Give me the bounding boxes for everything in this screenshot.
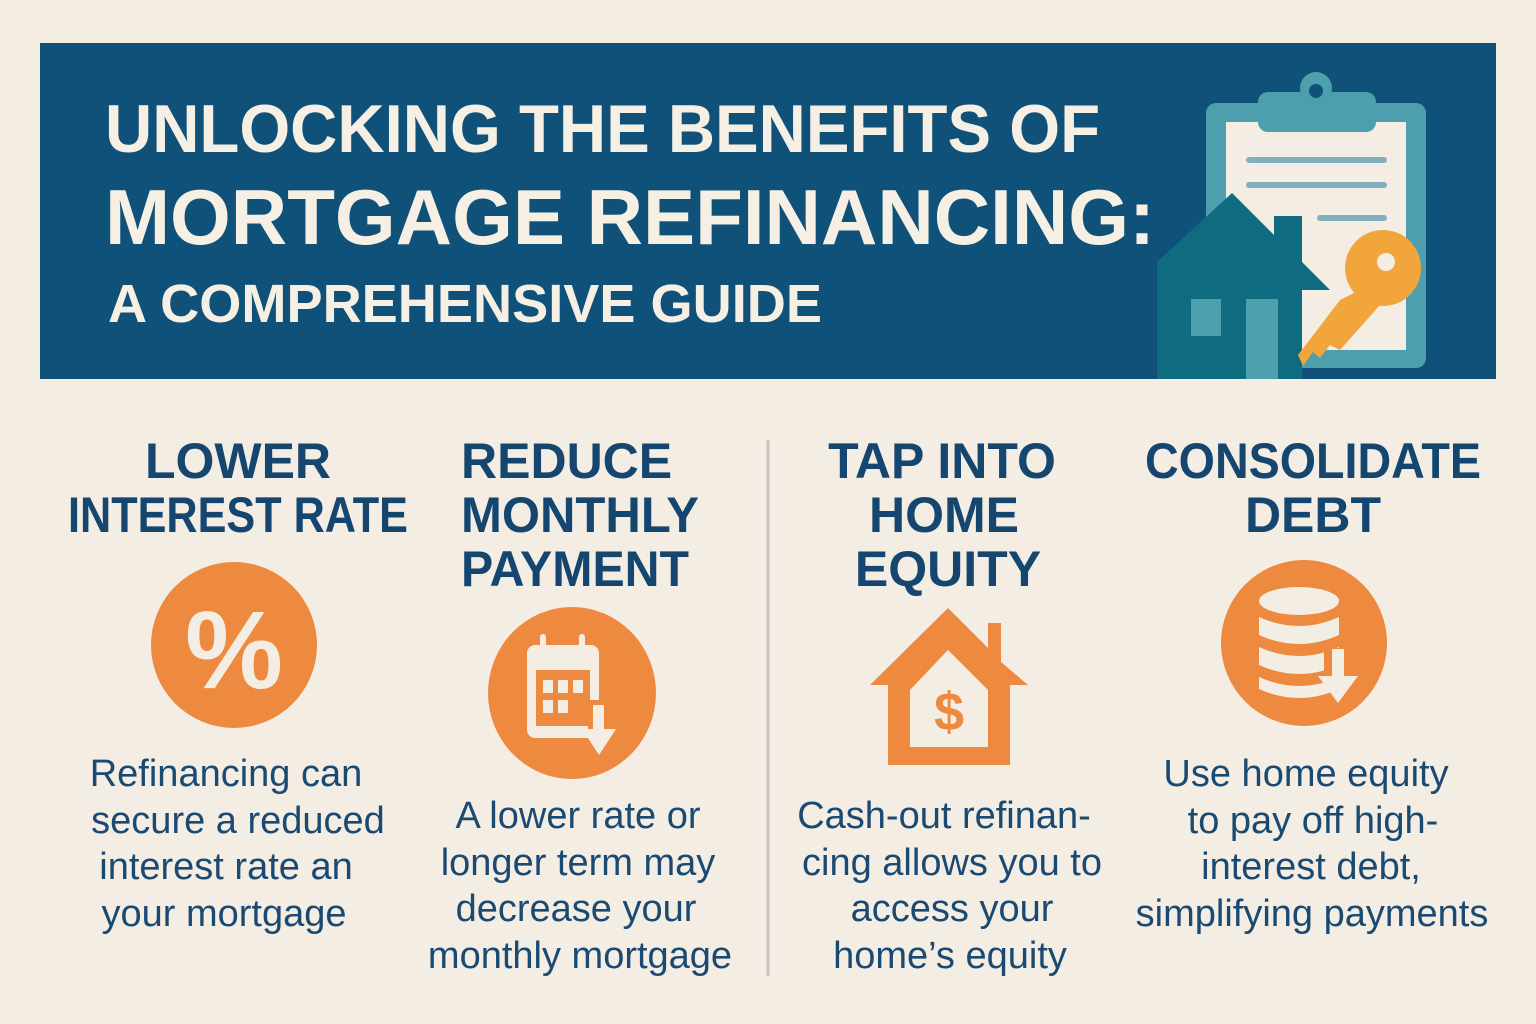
column: lower interest rate: secure a reduced	[91, 800, 385, 842]
title: MORTGAGE REFINANCING:	[105, 173, 1155, 261]
column: reduce monthly payment: REDUCE	[461, 433, 672, 489]
column: reduce monthly payment: longer term may	[441, 842, 715, 884]
icon: percent	[151, 562, 317, 728]
column: reduce monthly payment	[428, 433, 732, 977]
column: lower interest rate: INTEREST RATE	[68, 487, 408, 543]
icon: percent: %	[185, 589, 283, 712]
column: lower interest rate: Refinancing can	[90, 753, 362, 795]
divider	[766, 440, 770, 976]
column: consolidate debt: CONSOLIDATE	[1145, 433, 1481, 489]
column: tap into home equity: access your	[851, 888, 1054, 930]
column: tap into home equity: home’s equity	[833, 935, 1067, 977]
column: consolidate debt: simplifying payments	[1136, 893, 1488, 935]
icon: calendar	[488, 607, 656, 779]
column: tap into home equity: HOME	[869, 487, 1019, 543]
column: consolidate debt	[1136, 433, 1488, 935]
column: reduce monthly payment: decrease your	[456, 888, 697, 930]
column: lower interest rate: LOWER	[145, 433, 331, 489]
column: tap into home equity: Cash-out refinan-	[797, 795, 1091, 837]
icon: house with dollar: $	[934, 682, 964, 742]
column: consolidate debt: to pay off high-	[1188, 800, 1438, 842]
column: tap into home equity	[797, 433, 1102, 977]
column: consolidate debt: interest debt,	[1201, 846, 1421, 888]
column: reduce monthly payment: monthly mortgage	[428, 935, 732, 977]
column: reduce monthly payment: PAYMENT	[461, 541, 689, 597]
column: reduce monthly payment: A lower rate or	[456, 795, 701, 837]
icon: coins with arrow	[1221, 560, 1387, 726]
column: tap into home equity: cing allows you to	[802, 842, 1102, 884]
column: reduce monthly payment: MONTHLY	[461, 487, 699, 543]
title	[105, 91, 1155, 334]
title: UNLOCKING THE BENEFITS OF	[105, 91, 1100, 167]
column: lower interest rate: your mortgage	[101, 893, 347, 935]
column: consolidate debt: Use home equity	[1163, 753, 1449, 795]
illustration: clipboard, house, key	[1157, 72, 1426, 379]
column: tap into home equity: EQUITY	[855, 541, 1041, 597]
column: lower interest rate: interest rate an	[99, 846, 353, 888]
column: tap into home equity: TAP INTO	[828, 433, 1056, 489]
column: consolidate debt: DEBT	[1245, 487, 1381, 543]
header banner	[40, 43, 1496, 379]
title: A COMPREHENSIVE GUIDE	[108, 274, 822, 334]
icon: house with dollar	[870, 608, 1028, 765]
column: lower interest rate	[68, 433, 408, 935]
